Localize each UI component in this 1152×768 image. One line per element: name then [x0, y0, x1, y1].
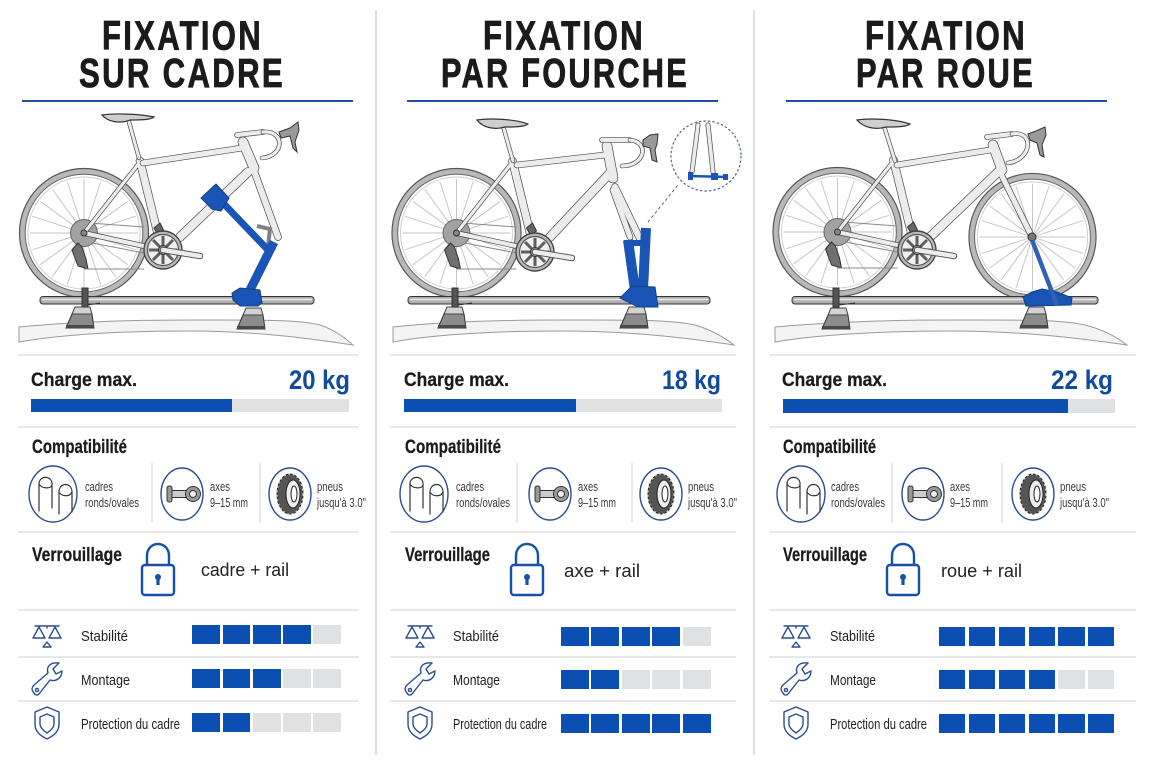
compatibilité: Compatibilité [405, 437, 501, 458]
compatibilité: 9–15 mm [578, 496, 616, 510]
verrouillage: Verrouillage [32, 545, 122, 566]
charge max: Charge max. [31, 370, 137, 391]
title: fixation par roue: PAR ROUE [856, 50, 1035, 96]
notes: Montage [81, 672, 130, 689]
charge max [31, 365, 350, 412]
verrouillage: roue + rail [941, 561, 1022, 581]
title: fixation par fourche: FIXATION [483, 12, 645, 58]
notes: Montage [830, 672, 876, 689]
title: fixation sur cadre [22, 12, 353, 102]
compatibilité: cadres [85, 480, 113, 494]
compatibilité: pneus [688, 480, 714, 494]
compatibilité: jusqu'à 3.0" [687, 496, 737, 510]
notes [769, 626, 1136, 739]
charge max: 20 kg [289, 365, 350, 395]
compatibilité: Compatibilité [32, 437, 127, 458]
charge max: Charge max. [404, 370, 509, 391]
illustration: vélo fixé par la roue [773, 119, 1127, 345]
notes: Protection du cadre [453, 716, 547, 733]
compatibilité [777, 437, 1109, 523]
panel: fixation par fourche [390, 12, 741, 739]
verrouillage: Verrouillage [783, 545, 867, 566]
title: fixation sur cadre: SUR CADRE [79, 50, 285, 96]
verrouillage [783, 544, 1022, 595]
charge max: 18 kg [662, 365, 721, 395]
charge max: Charge max. [782, 370, 887, 391]
compatibilité: axes [210, 480, 230, 494]
title: fixation sur cadre: FIXATION [102, 12, 263, 58]
notes: Stabilité [81, 628, 128, 645]
compatibilité: jusqu'à 3.0" [316, 496, 366, 510]
charge max [782, 365, 1115, 413]
illustration: vélo fixé par la fourche [392, 119, 741, 345]
charge max [404, 365, 722, 412]
compatibilité: pneus [317, 480, 343, 494]
compatibilité: axes [950, 480, 970, 494]
charge max: 22 kg [1051, 365, 1113, 395]
notes [18, 625, 359, 739]
notes: Protection du cadre [830, 716, 927, 733]
notes [390, 626, 736, 739]
title: fixation par fourche [407, 12, 718, 102]
column dividers [376, 10, 754, 755]
compatibilité: Compatibilité [783, 437, 876, 458]
notes: Stabilité [830, 628, 875, 645]
compatibilité: axes [578, 480, 598, 494]
compatibilité: pneus [1060, 480, 1086, 494]
compatibilité: cadres [456, 480, 484, 494]
notes: Protection du cadre [81, 716, 180, 733]
compatibilité [29, 437, 366, 523]
compatibilité: ronds/ovales [831, 496, 885, 510]
notes: Montage [453, 672, 500, 689]
notes: Stabilité [453, 628, 499, 645]
compatibilité: ronds/ovales [456, 496, 510, 510]
illustration: vélo fixé par le cadre [19, 114, 353, 345]
verrouillage: Verrouillage [405, 545, 490, 566]
compatibilité: jusqu'à 3.0" [1059, 496, 1109, 510]
compatibilité: 9–15 mm [210, 496, 248, 510]
title: fixation par roue [786, 12, 1107, 102]
compatibilité: cadres [831, 480, 859, 494]
panel: fixation par roue [769, 12, 1136, 739]
compatibilité: ronds/ovales [85, 496, 139, 510]
compatibilité [400, 437, 737, 523]
compatibilité: 9–15 mm [950, 496, 988, 510]
title: fixation par fourche: PAR FOURCHE [441, 50, 689, 96]
verrouillage [405, 544, 640, 595]
title: fixation par roue: FIXATION [865, 12, 1027, 58]
verrouillage [32, 544, 289, 595]
panel: fixation sur cadre [18, 12, 366, 739]
verrouillage: cadre + rail [201, 560, 289, 580]
verrouillage: axe + rail [564, 561, 640, 581]
